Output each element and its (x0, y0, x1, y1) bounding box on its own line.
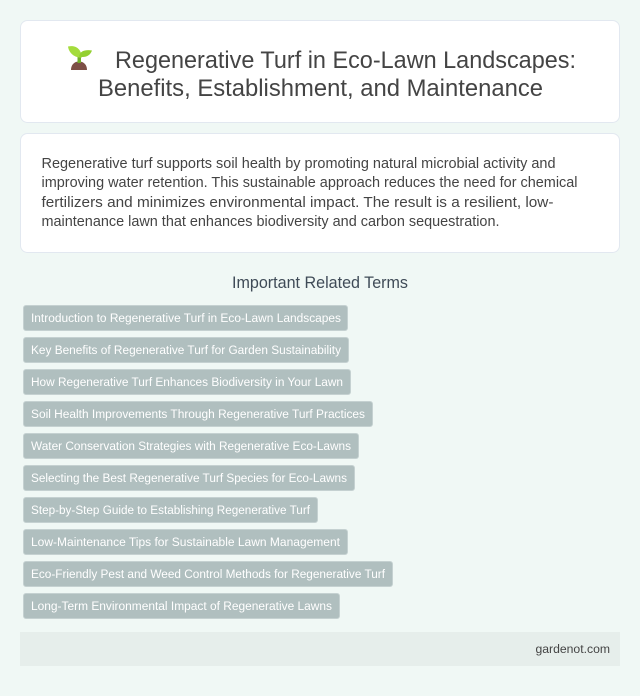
chip 7 (24, 498, 318, 522)
heading: important related terms: Important Related Terms (232, 274, 408, 292)
footer (20, 632, 620, 666)
panel: title card (20, 20, 620, 122)
chip 6: Selecting the Best Regenerative Turf Species for Eco-Lawns (31, 471, 347, 485)
list: related term chips (24, 306, 392, 618)
chip 10 (24, 594, 340, 618)
chip 7: Step-by-Step Guide to Establishing Regenerative Turf (31, 503, 311, 517)
chip 8: Low-Maintenance Tips for Sustainable Lawn Management (31, 535, 341, 549)
title: Regenerative Turf in Eco-Lawn Landscapes: (115, 47, 576, 74)
chip 9: Eco-Friendly Pest and Weed Control Methods for Regenerative Turf (31, 567, 386, 581)
chip 3: How Regenerative Turf Enhances Biodiversity in Your Lawn (31, 375, 343, 389)
text block: summary paragraph: Regenerative turf supports soil health by promoting natural microbial activity and (42, 156, 556, 172)
chip 2: Key Benefits of Regenerative Turf for Garden Sustainability (31, 343, 342, 357)
chip 10: Long-Term Environmental Impact of Regenerative Lawns (31, 599, 332, 613)
chip 5: Water Conservation Strategies with Regenerative Eco-Lawns (31, 439, 351, 453)
chip 3 (24, 370, 350, 394)
chip 4 (24, 402, 372, 426)
chip 6 (24, 466, 354, 490)
title: Benefits, Establishment, and Maintenance (98, 75, 543, 102)
chip 1 (24, 306, 348, 330)
footer source text: gardenot.com (536, 642, 610, 656)
chip 4: Soil Health Improvements Through Regenerative Turf Practices (31, 407, 365, 421)
chip 9 (24, 562, 392, 586)
panel: summary (20, 134, 620, 252)
chip 1: Introduction to Regenerative Turf in Eco-Lawn Landscapes (31, 311, 341, 325)
chip 8 (24, 530, 348, 554)
text block: summary paragraph: fertilizers and minimizes environmental impact. The result is a resilient, low- (42, 195, 554, 211)
text block: summary paragraph: improving water retention. This sustainable approach reduces the need for chemical (42, 175, 578, 191)
chip 5 (24, 434, 358, 458)
text block: summary paragraph: maintenance lawn that enhances biodiversity and carbon sequestration. (42, 214, 500, 230)
icon: seedling (68, 46, 92, 70)
chip 2 (24, 338, 348, 362)
